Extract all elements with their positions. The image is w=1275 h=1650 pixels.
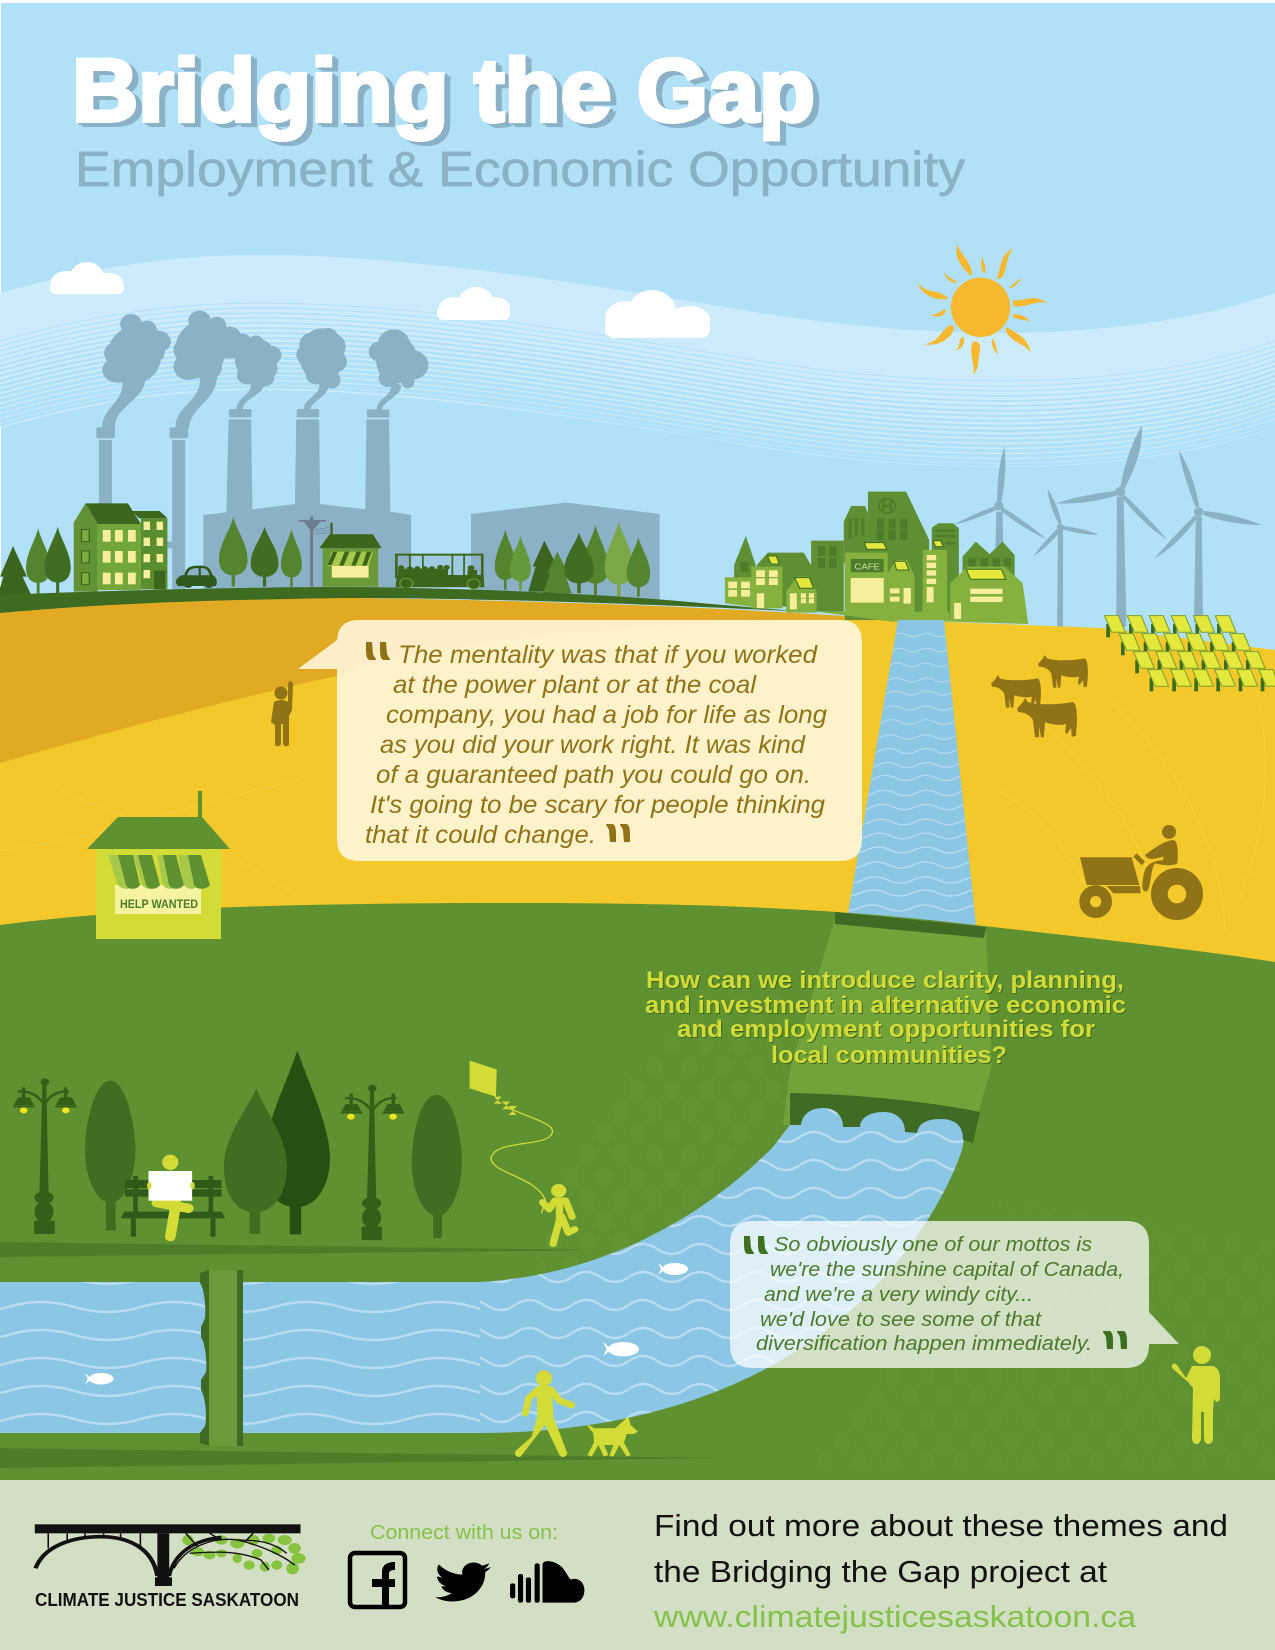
- quote text: diversification happen immediately.: [756, 1332, 1092, 1355]
- green foreground hill: [0, 903, 1275, 1480]
- apartment building: [74, 503, 167, 592]
- green town: [725, 492, 1028, 624]
- bench: [121, 1176, 225, 1237]
- rooftop solar panels: [767, 541, 1006, 588]
- kite: [470, 1061, 553, 1213]
- cows: [991, 655, 1088, 737]
- orange field: [0, 598, 898, 763]
- icon: twitter: [435, 1562, 491, 1602]
- dark windows: [740, 499, 1011, 572]
- key question: local communities?: [771, 1042, 1007, 1069]
- cafe sign: CAFE: [855, 562, 880, 571]
- opening quote mark: [366, 642, 390, 660]
- quote text: at the power plant or at the coal: [393, 671, 757, 699]
- park scene: [13, 1051, 575, 1244]
- halftone texture: [540, 990, 790, 1270]
- trees: [0, 517, 650, 597]
- person reading newspaper: [147, 1155, 195, 1237]
- subtitle: Employment & Economic Opportunity: [75, 143, 966, 197]
- walker and dog: [515, 1370, 638, 1457]
- call to action: [653, 1508, 1228, 1634]
- quote text: we're the sunshine capital of Canada,: [770, 1258, 1124, 1281]
- quote text: as you did your work right. It was kind: [380, 731, 806, 759]
- help wanted shop: [87, 791, 230, 939]
- smoke plumes: [102, 311, 428, 428]
- logo wordmark: CLIMATE JUSTICE SASKATOON: [35, 1589, 299, 1610]
- utility pole: [298, 517, 332, 587]
- dark green horizon strip: [0, 587, 806, 613]
- standing person: [1172, 1346, 1220, 1444]
- icon: soundcloud: [510, 1561, 584, 1603]
- sun: [917, 244, 1048, 374]
- key question: and investment in alternative economic: [645, 992, 1126, 1019]
- yellow farmland: [0, 598, 1275, 1100]
- fish: [85, 1263, 688, 1384]
- opening quote mark: [744, 1236, 768, 1254]
- quote bubble one: [298, 620, 862, 861]
- narrow upper river: [848, 620, 976, 925]
- street lamp left: [13, 1078, 77, 1234]
- quote text: of a guaranteed path you could go on.: [376, 761, 811, 789]
- road to stone bridge: [783, 918, 992, 1125]
- key question: How can we introduce clarity, planning,: [646, 967, 1124, 994]
- cloud 3: [605, 290, 710, 338]
- sign text: HELP WANTED: [120, 897, 198, 911]
- wind turbines: [953, 426, 1262, 630]
- quote text: It's going to be scary for people thinking: [370, 791, 825, 819]
- closing quote mark: [1103, 1331, 1127, 1349]
- title: Bridging the Gap: [72, 40, 815, 140]
- roadside shop: [319, 523, 382, 587]
- icon: facebook: [350, 1553, 405, 1607]
- key question: and employment opportunities for: [677, 1016, 1095, 1043]
- quote bubble two: [730, 1221, 1179, 1368]
- quote text: and we're a very windy city...: [764, 1283, 1033, 1306]
- car: [176, 566, 217, 588]
- cloud 2: [437, 287, 510, 320]
- cloud 1: [50, 262, 124, 294]
- dark buildings: [734, 492, 1015, 620]
- cream windows: [728, 555, 1003, 619]
- quote text: we'd love to see some of that: [760, 1308, 1042, 1331]
- logo: bridge and tree: [35, 1524, 306, 1586]
- field furrow texture: [0, 660, 1266, 930]
- bus with passengers: [396, 555, 484, 589]
- awning: [108, 855, 210, 889]
- stone bridge with arches: [790, 1093, 980, 1143]
- call to action: www.climatejusticesaskatoon.ca: [653, 1599, 1137, 1634]
- quote text: company, you had a job for life as long: [386, 701, 827, 729]
- quote text: So obviously one of our mottos is: [774, 1233, 1092, 1256]
- quote text: [756, 1233, 1124, 1355]
- path shadows: [0, 1242, 715, 1468]
- street lamp right: [341, 1085, 404, 1240]
- wavy wind band: [0, 255, 1275, 467]
- quote text: [365, 641, 827, 849]
- closing quote mark: [606, 824, 630, 842]
- sky background: [1, 3, 1275, 703]
- call to action: the Bridging the Gap project at: [654, 1554, 1107, 1589]
- call to action: Find out more about these themes and: [654, 1508, 1228, 1543]
- connect label: Connect with us on:: [370, 1522, 558, 1544]
- light buildings: [725, 550, 1028, 624]
- wide lower river: [0, 1100, 1000, 1440]
- waving worker: [271, 681, 293, 746]
- quote text: that it could change.: [365, 821, 596, 849]
- footer band: [0, 1480, 1275, 1650]
- road bridge seen from above: [200, 1270, 243, 1446]
- factory, town street and hill (left): [0, 311, 660, 600]
- halftone texture lower right: [800, 1200, 1275, 1470]
- quote text: The mentality was that if you worked: [398, 641, 818, 669]
- park trees: [85, 1051, 462, 1238]
- walker: [515, 1370, 572, 1457]
- key question: [645, 967, 1126, 1069]
- dog: [587, 1417, 638, 1457]
- bridge parapet: [835, 912, 986, 938]
- cafe sign: [851, 559, 884, 572]
- tractor with driver: [1080, 825, 1195, 913]
- chimneys and factory buildings: [96, 409, 660, 600]
- solar panel field: [1104, 616, 1275, 691]
- kid with kite: [543, 1184, 575, 1244]
